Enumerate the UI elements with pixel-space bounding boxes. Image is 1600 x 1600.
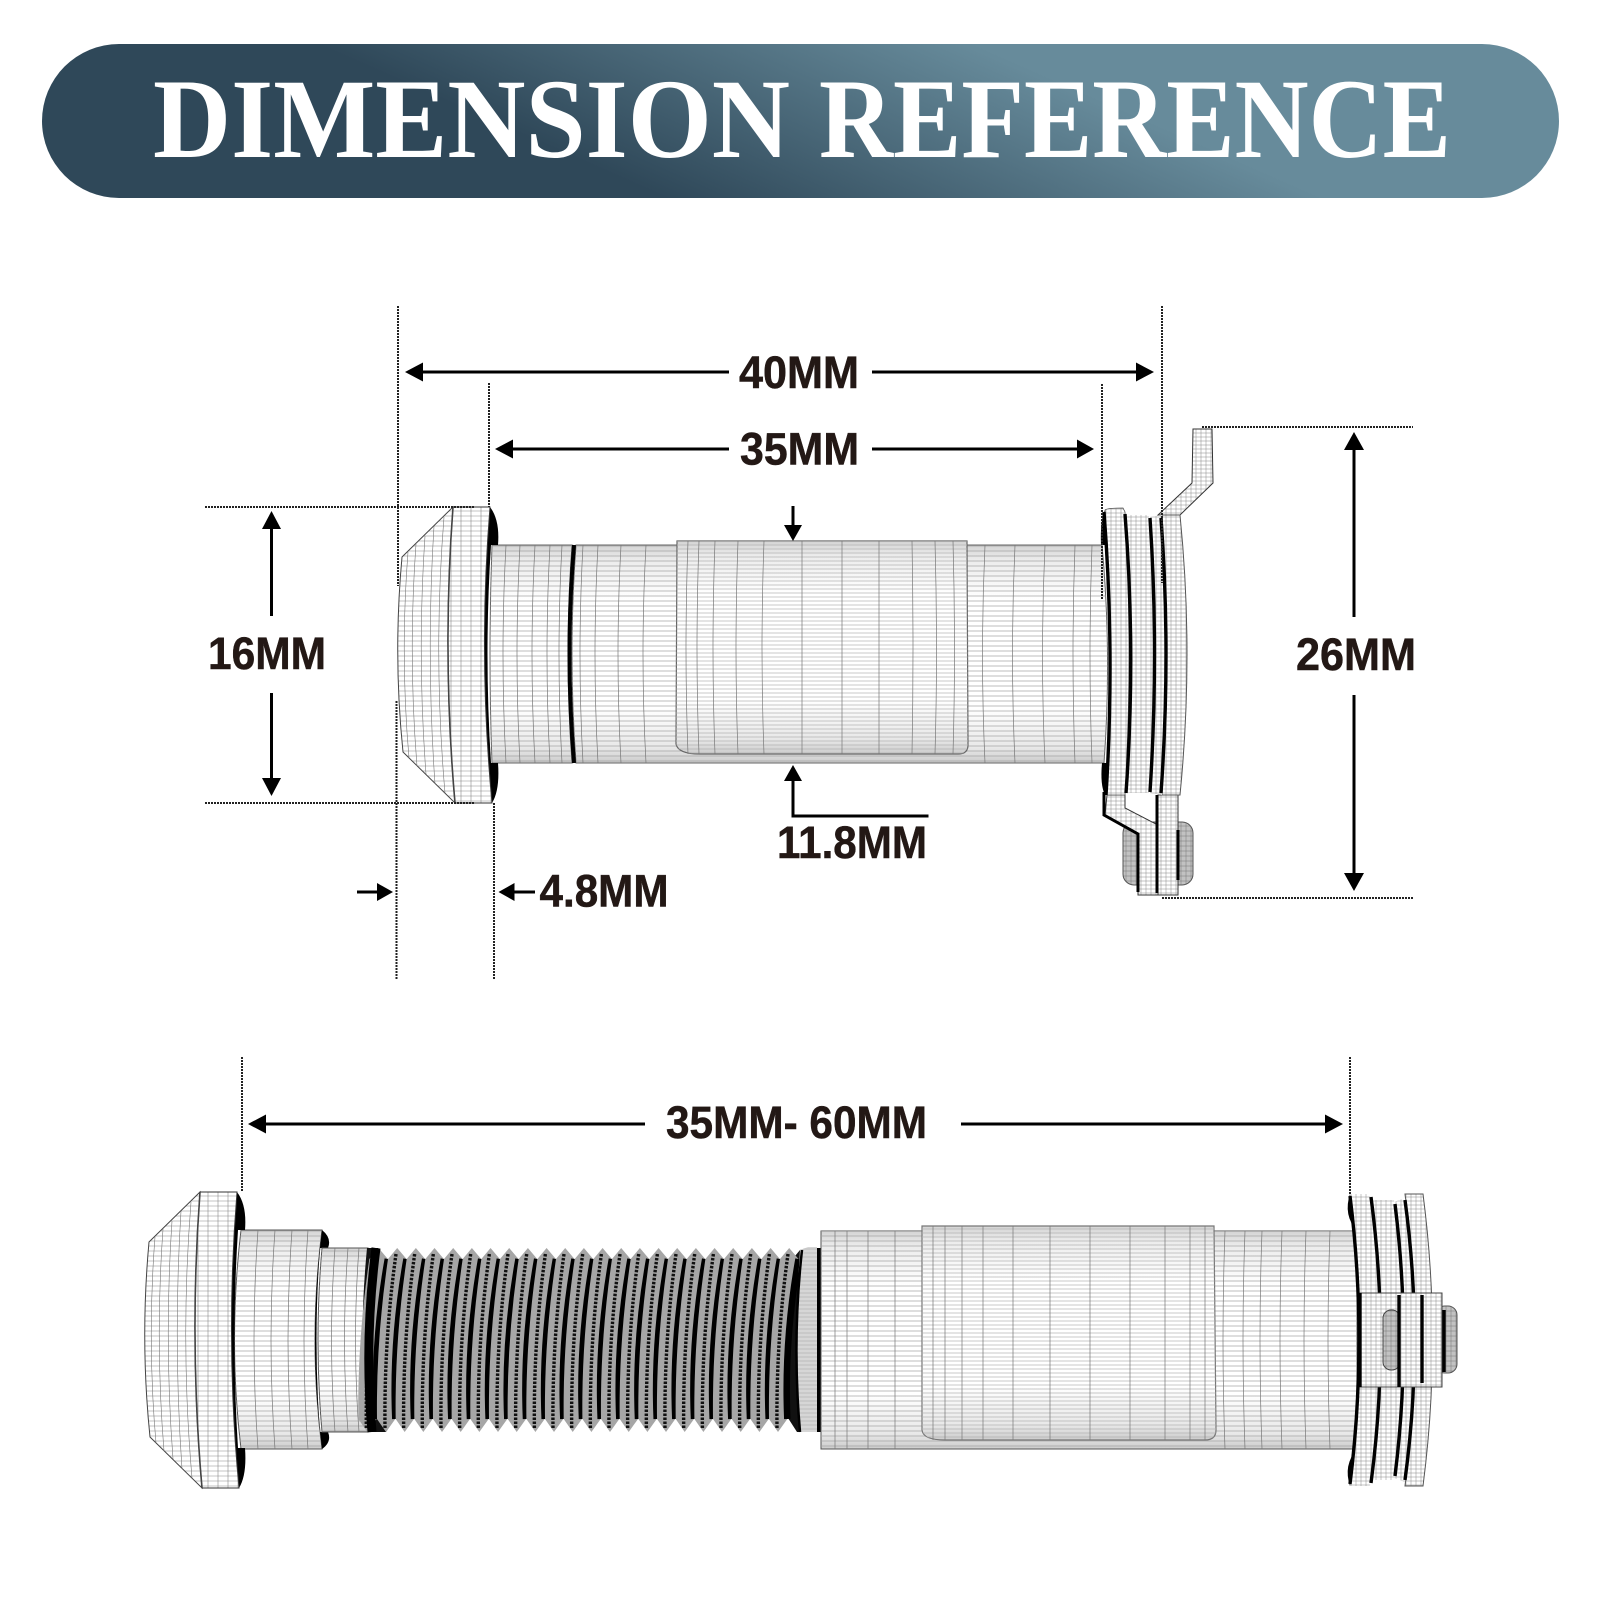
- bottom clip tab block: [1360, 1293, 1444, 1387]
- bottom threaded section: [358, 1247, 819, 1432]
- dimension: 11.8MM: 11.8MM: [777, 817, 927, 868]
- banner background pill: [42, 44, 1559, 198]
- top flange and dome head: [398, 507, 498, 803]
- top upper clip tab: [1158, 429, 1213, 515]
- dotted extension lines: top drawing: [205, 306, 1413, 980]
- dimension: 16MM: [208, 511, 326, 796]
- top collar: [490, 545, 572, 763]
- dimension: 16MM: 16MM: [208, 628, 326, 679]
- title text: [153, 57, 1451, 182]
- top peephole drawing: compact 35mm body: [398, 429, 1213, 895]
- dimension: 40MM: [405, 347, 1154, 398]
- top knob behind tabs: [1123, 822, 1193, 885]
- bottom sleeve: [922, 1226, 1216, 1440]
- bottom flange and dome head: [145, 1192, 245, 1488]
- dimension: 40MM: 40MM: [739, 347, 859, 398]
- title text: REFERENCE: [819, 57, 1451, 182]
- bottom washer plates: [1348, 1194, 1432, 1486]
- dimension: 4.8MM: 4.8MM: [540, 866, 668, 916]
- title text: DIMENSION: [153, 57, 790, 182]
- dimension: 26MM: [1296, 432, 1416, 891]
- top tube barrel: [570, 545, 1108, 763]
- title banner: [42, 44, 1559, 198]
- dimension: 35MM-60MM: [248, 1097, 1343, 1148]
- bottom collar: [234, 1230, 329, 1449]
- dimension: 11.8MM: [777, 506, 928, 868]
- bottom body: [821, 1231, 1357, 1449]
- bottom step section: [318, 1248, 368, 1432]
- bottom right knob: [1436, 1306, 1457, 1373]
- dimension: 4.8MM: [357, 866, 668, 916]
- top washer plates: [1101, 508, 1187, 795]
- dotted extension lines: bottom drawing: [242, 1057, 1350, 1194]
- dimension: 35MM: [495, 424, 1094, 474]
- dimension: 35MM-60MM: 35MM- 60MM: [666, 1097, 927, 1148]
- top lower clip tabs: [1104, 792, 1178, 895]
- dimension: 35MM: 35MM: [740, 424, 859, 474]
- bottom peephole drawing: extended threaded body: [145, 1192, 1457, 1488]
- dimension: 26MM: 26MM: [1296, 629, 1416, 680]
- top sleeve: [676, 541, 968, 754]
